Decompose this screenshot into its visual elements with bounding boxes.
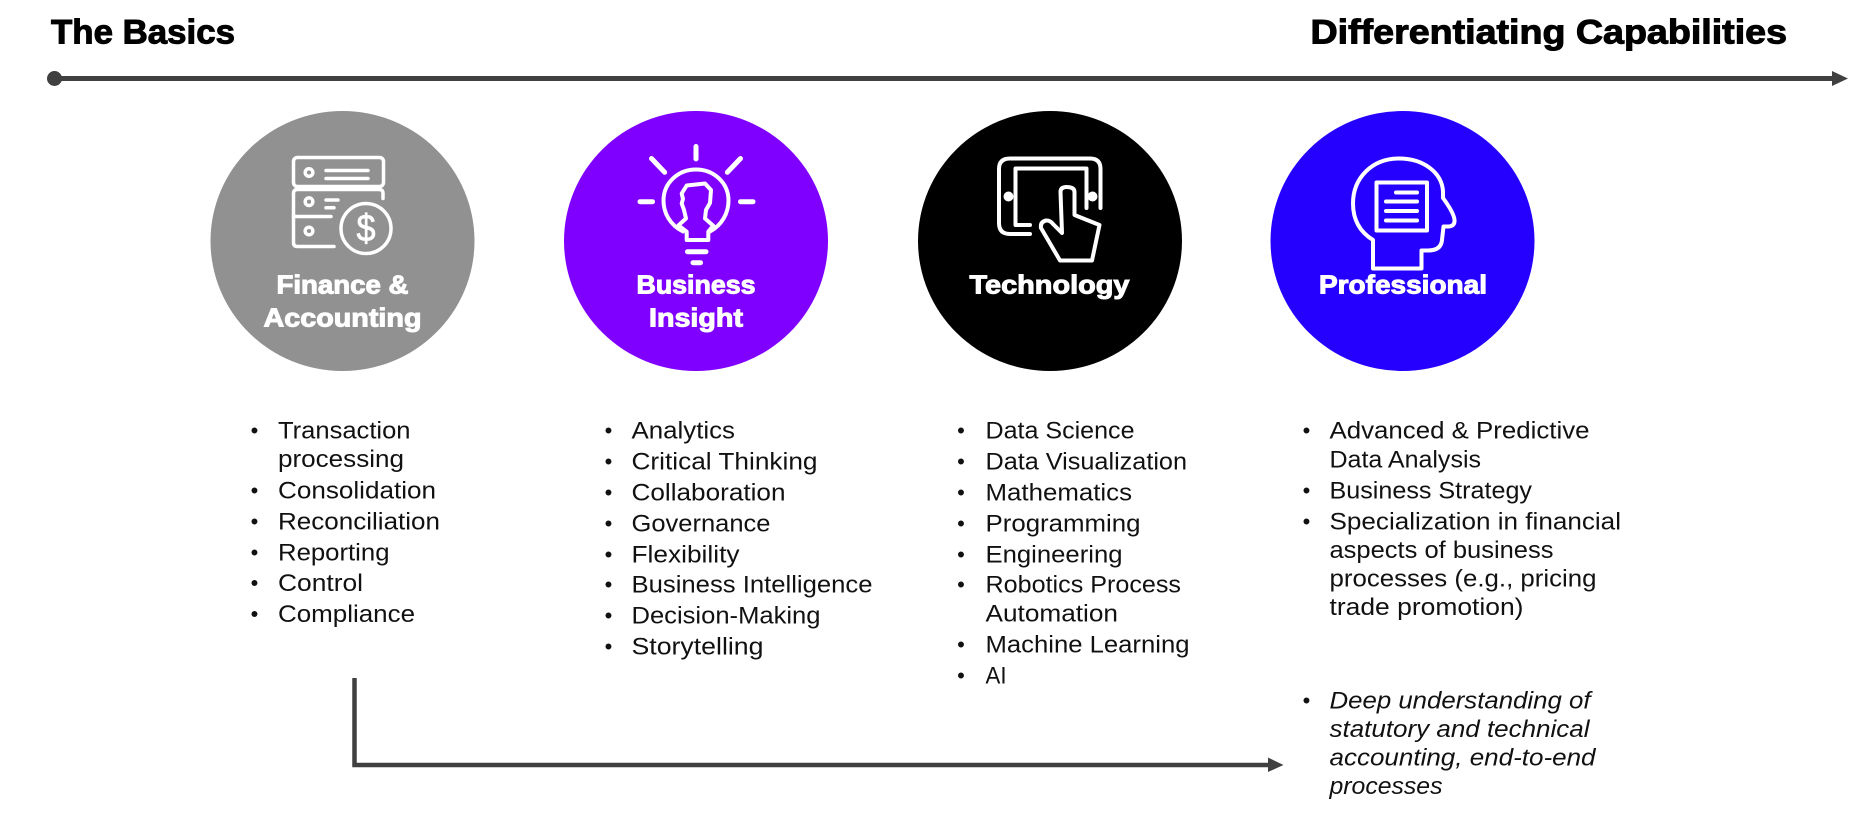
- list: Business Insight skills: Analytics: [632, 418, 735, 444]
- list: Finance & Accounting skills: Reporting: [278, 540, 390, 566]
- list: Finance & Accounting skills: Control: [278, 570, 363, 597]
- list: Business Insight skills: Flexibility: [632, 542, 740, 568]
- panel: Finance & Accounting circle: [210, 111, 474, 371]
- list: Technology skills: Engineering: [986, 542, 1122, 568]
- list: Technology skills: Automation: [986, 600, 1118, 628]
- list: Business Insight skills: Decision-Making: [632, 602, 820, 630]
- list: Business Insight skills: Critical Thinking: [632, 448, 818, 476]
- list: Finance & Accounting skills: •: [251, 540, 258, 565]
- list: Professional skills: Advanced & Predictive: [1330, 418, 1590, 444]
- panel: Business Insight circle: [564, 111, 828, 371]
- list: Business Insight skills: •: [605, 572, 612, 597]
- list: Business Insight skills: Governance: [632, 510, 770, 538]
- heading: The Basics: The Basics: [51, 14, 235, 52]
- list: Technology skills: •: [957, 542, 965, 567]
- icon: head with document: [1353, 158, 1455, 268]
- list: Professional skills: Specialization in financial: [1330, 508, 1621, 536]
- list: Technology skills: •: [957, 572, 965, 597]
- list: Professional skills: •: [1303, 418, 1310, 443]
- list: Business Insight skills: [605, 418, 872, 660]
- list: Technology skills: [957, 418, 1190, 690]
- callout: italic Deep understanding item: •: [1303, 688, 1310, 713]
- list: Business Insight skills: •: [605, 603, 612, 628]
- icon: dollar sign: $: [356, 208, 376, 250]
- list: Finance & Accounting skills: •: [251, 418, 258, 443]
- list: Finance & Accounting skills: Compliance: [278, 601, 415, 628]
- list: Technology skills: Data Science: [986, 418, 1134, 444]
- list: Finance & Accounting skills: •: [251, 570, 258, 596]
- list: Professional skills: •: [1303, 509, 1310, 534]
- label: Professional: Professional: [1319, 270, 1487, 300]
- list: Professional skills: processes (e.g., pricing: [1330, 566, 1596, 592]
- list: Finance & Accounting skills: •: [251, 602, 258, 626]
- list: Finance & Accounting skills: Consolidation: [278, 478, 436, 504]
- list: Finance & Accounting skills: Reconciliation: [278, 508, 440, 536]
- list: Technology skills: Programming: [986, 510, 1140, 538]
- elbow arrow to Professional item: [354, 678, 1284, 772]
- list: Business Insight skills: Collaboration: [632, 480, 786, 506]
- list: Technology skills: Machine Learning: [986, 632, 1190, 658]
- label: Finance & Accounting: Accounting: [264, 302, 422, 332]
- list: Professional skills: Business Strategy: [1330, 478, 1532, 504]
- list: Business Insight skills: •: [605, 449, 612, 474]
- list: Technology skills: Data Visualization: [986, 448, 1187, 476]
- list: Business Insight skills: •: [605, 480, 612, 505]
- label: Finance & Accounting: Finance &: [276, 270, 408, 300]
- list: Technology skills: AI: [986, 662, 1006, 690]
- label: Business Insight: [636, 270, 756, 332]
- heading: Differentiating Capabilities: Differentiating Capabilities: [1310, 14, 1787, 52]
- list: Finance & Accounting skills: [251, 418, 440, 628]
- list: Technology skills: •: [957, 418, 965, 443]
- timeline arrow: [47, 71, 1848, 86]
- callout: italic Deep understanding item: Deep understanding of: [1330, 688, 1593, 714]
- list: Business Insight skills: •: [605, 634, 612, 659]
- list: Business Insight skills: •: [605, 418, 612, 443]
- list: Finance & Accounting skills: processing: [278, 446, 404, 473]
- callout: italic Deep understanding item: processes: [1328, 773, 1442, 800]
- icon: tablet with pointing hand: [999, 158, 1100, 260]
- list: Technology skills: Robotics Process: [986, 572, 1181, 598]
- list: Technology skills: •: [957, 511, 965, 536]
- icon: server with dollar coin: [294, 158, 391, 254]
- panel: Technology circle: [918, 111, 1182, 371]
- list: Professional skills: trade promotion): [1330, 594, 1524, 621]
- panel: Professional circle: [1270, 111, 1534, 371]
- list: Professional skills: aspects of business: [1330, 537, 1554, 564]
- callout: italic Deep understanding item: accounting, end-to-end: [1330, 744, 1596, 772]
- list: Technology skills: •: [957, 449, 965, 474]
- label: Technology: Technology: [970, 270, 1130, 300]
- callout: italic Deep understanding item: statutory and technical: [1330, 716, 1590, 743]
- callout: italic Deep understanding item: [1303, 688, 1596, 800]
- list: Business Insight skills: Storytelling: [632, 634, 764, 660]
- list: Business Insight skills: •: [605, 511, 612, 536]
- list: Finance & Accounting skills: •: [251, 478, 258, 503]
- label: Business Insight: Business: [636, 270, 756, 300]
- list: Business Insight skills: Business Intelligence: [632, 572, 872, 598]
- list: Finance & Accounting skills: •: [251, 509, 258, 534]
- list: Technology skills: •: [957, 480, 965, 505]
- list: Professional skills: •: [1303, 478, 1310, 503]
- list: Technology skills: Mathematics: [986, 480, 1132, 506]
- icon: light bulb with head: [640, 146, 753, 263]
- list: Finance & Accounting skills: Transaction: [278, 418, 410, 444]
- list: Professional skills: Data Analysis: [1330, 446, 1481, 474]
- label: Business Insight: Insight: [649, 302, 743, 332]
- list: Technology skills: •: [957, 632, 965, 657]
- list: Technology skills: •: [957, 663, 965, 688]
- label: Finance & Accounting: [264, 270, 422, 332]
- list: Professional skills: [1303, 418, 1621, 621]
- list: Business Insight skills: •: [605, 542, 612, 567]
